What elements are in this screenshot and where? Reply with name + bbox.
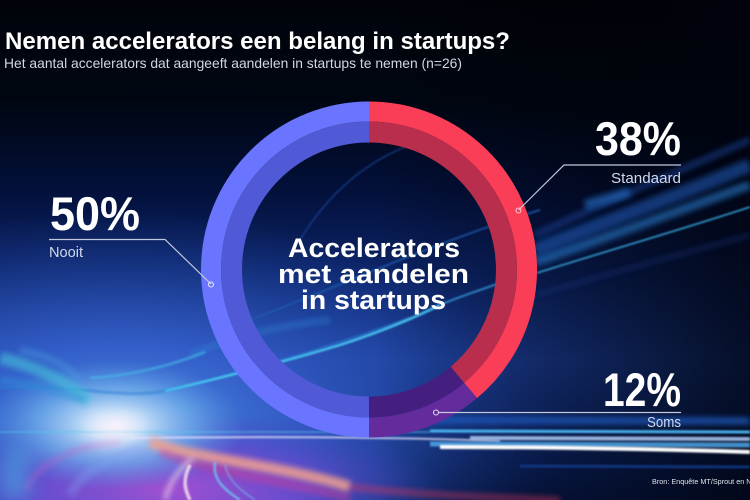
segment: Soms 12%: [369, 375, 471, 428]
callout: 50% Nooit: Nooit: [49, 244, 84, 261]
center label: Accelerators: [288, 233, 460, 263]
center label: in startups: [301, 285, 446, 315]
callout: 38% Standaard: 38%: [595, 112, 681, 165]
callout: 12% Soms: 12%: [603, 363, 681, 416]
title: Nemen accelerators een belang in startups?: [5, 28, 510, 55]
segment: Nooit 50%: [211, 112, 369, 428]
callout: 50% Nooit: [49, 187, 214, 287]
subtitle: Het aantal accelerators dat aangeeft aandelen in startups te nemen (n=26): [4, 55, 462, 71]
callout: 38% Standaard: [516, 112, 681, 213]
donut chart: [211, 112, 527, 428]
segment: Standaard 38%: [369, 112, 527, 390]
callout: 38% Standaard: Standaard: [611, 170, 681, 187]
center label: [278, 233, 469, 315]
callout: 12% Soms: [434, 363, 681, 431]
callout: 50% Nooit: 50%: [50, 187, 140, 240]
callout: 12% Soms: Soms: [647, 414, 681, 431]
center label: met aandelen: [278, 259, 469, 289]
